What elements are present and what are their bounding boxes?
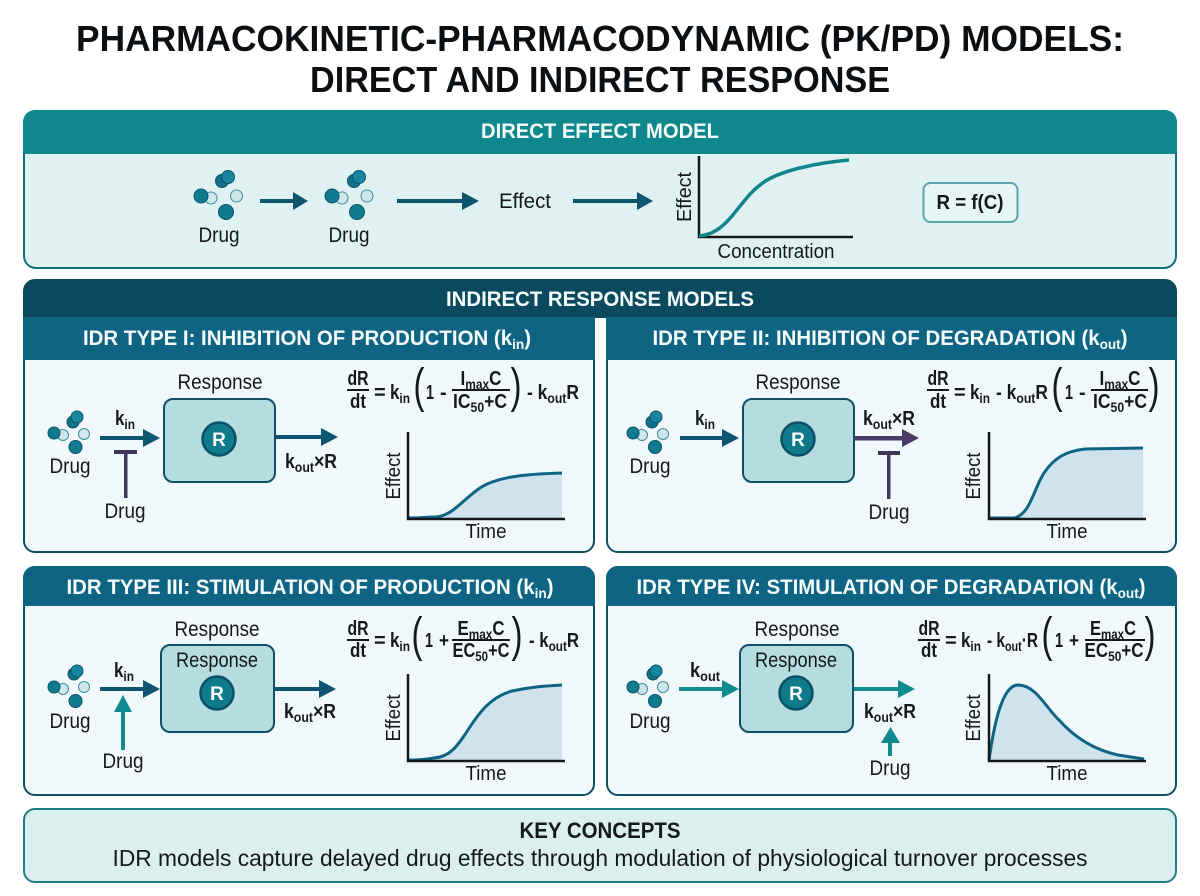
chart: effect vs time xyxy=(963,432,1146,543)
icon: drug molecules xyxy=(48,411,90,454)
equation: max xyxy=(465,376,489,392)
equation: C xyxy=(1128,368,1140,390)
chart: effect vs time: Effect xyxy=(383,694,405,742)
arrow: drug to effect xyxy=(397,192,479,210)
label: response: Response xyxy=(174,618,260,641)
equation: ·R xyxy=(1022,630,1038,652)
chart: effect vs time: Effect xyxy=(383,452,405,500)
chart: effect vs time: Time xyxy=(466,763,506,785)
arrow: effect to chart xyxy=(573,192,653,210)
response compartment: R xyxy=(791,430,805,451)
arrow: stimulation xyxy=(114,695,132,750)
label: kout x R: k xyxy=(284,701,295,723)
response compartment xyxy=(740,645,853,732)
label: kout x R: ×R xyxy=(893,701,916,723)
label: kout x R: out xyxy=(873,416,892,432)
equation: R xyxy=(1035,382,1048,404)
equation box xyxy=(924,183,1018,222)
label: kout x R: ×R xyxy=(892,408,915,430)
equation: C xyxy=(1124,618,1136,640)
equation: EC xyxy=(452,640,480,662)
equation: 1 xyxy=(426,382,434,404)
label: kout x R: k xyxy=(863,408,874,430)
equation: 50 xyxy=(1111,399,1124,415)
label: kin: k xyxy=(115,408,126,430)
equation: - k xyxy=(987,630,1010,652)
equation: 50 xyxy=(471,399,484,415)
equation: dR xyxy=(918,618,940,640)
equation: E xyxy=(1090,618,1103,640)
equation: out xyxy=(1016,390,1036,406)
label: drug: Drug xyxy=(50,455,90,478)
type II header xyxy=(606,317,1177,360)
equation: in xyxy=(399,390,410,406)
arrow: kout in xyxy=(679,680,739,698)
equation: ( xyxy=(412,609,423,662)
response compartment: R xyxy=(210,684,224,705)
equation: in xyxy=(979,390,990,406)
direct effect header: DIRECT EFFECT MODEL xyxy=(481,120,719,143)
equation: ) xyxy=(1148,360,1160,413)
label: drug stimulator: Drug xyxy=(870,757,910,780)
equation: E xyxy=(458,618,471,640)
equation: dR xyxy=(348,618,369,640)
equation: - k xyxy=(527,382,550,404)
response compartment xyxy=(161,645,274,732)
type III header: IDR TYPE III: STIMULATION OF PRODUCTION (k xyxy=(66,576,548,599)
equation: ( xyxy=(414,360,425,413)
response compartment xyxy=(164,399,275,482)
equation: R xyxy=(567,630,579,652)
equation: I xyxy=(1100,368,1105,390)
chart: effect vs time xyxy=(963,674,1146,785)
arrow: drug to drug xyxy=(260,192,308,210)
arrow: inhibited kout xyxy=(855,429,919,447)
equation: max xyxy=(469,626,493,642)
type II header: out xyxy=(1100,336,1121,352)
equation: ( xyxy=(1042,609,1053,662)
equation: in xyxy=(399,638,410,654)
chart: effect vs concentration: Concentration xyxy=(718,241,834,263)
arrow: kout xyxy=(275,680,336,698)
key concepts heading: KEY CONCEPTS xyxy=(520,818,680,843)
arrow: stimulated kout xyxy=(854,680,915,698)
equation: IC xyxy=(453,391,473,413)
equation: 50 xyxy=(1108,648,1121,664)
icon: drug molecules xyxy=(48,665,90,708)
equation: = xyxy=(374,630,386,652)
equation xyxy=(918,609,1156,664)
equation: max xyxy=(1101,626,1124,642)
label: kout x R: k xyxy=(864,701,875,723)
icon: drug molecules 2 xyxy=(325,170,373,220)
icon: drug molecules 1 xyxy=(194,170,242,220)
arrow: kin xyxy=(680,429,739,447)
equation: EC xyxy=(1084,640,1112,662)
panel: key concepts xyxy=(24,809,1176,882)
icon: drug molecules xyxy=(627,665,668,708)
label: drug: Drug xyxy=(630,710,670,733)
equation: ( xyxy=(1052,360,1063,413)
equation: dR xyxy=(348,368,369,390)
arrow: kin xyxy=(100,680,160,698)
inhibition bar xyxy=(114,450,137,498)
label: drug: Drug xyxy=(50,710,90,733)
label: response: Response xyxy=(178,371,262,394)
equation: +C xyxy=(1121,640,1144,662)
arrow: kin xyxy=(100,429,160,447)
equation: out xyxy=(549,638,567,654)
chart: effect vs concentration xyxy=(674,156,853,263)
chart: effect vs time: Time xyxy=(466,521,506,543)
label: effect: Effect xyxy=(499,190,551,213)
type IV header: IDR TYPE IV: STIMULATION OF DEGRADATION (k xyxy=(636,576,1133,599)
label: drug 2: Drug xyxy=(328,224,370,247)
equation: +C xyxy=(488,640,510,662)
label: kout x R: ×R xyxy=(314,451,337,473)
label: response: Response xyxy=(756,371,840,394)
direct effect header xyxy=(23,110,1177,154)
type III header xyxy=(23,566,595,606)
equation: 1 xyxy=(425,630,433,652)
equation: max xyxy=(1104,376,1128,392)
equation: dt xyxy=(930,391,946,413)
type IV header: ) xyxy=(1139,576,1146,599)
inhibition bar xyxy=(878,451,900,499)
equation: 1 xyxy=(1055,630,1063,652)
equation: in xyxy=(970,638,981,654)
arrow: stimulation xyxy=(881,727,900,756)
label: response: Response xyxy=(754,618,840,641)
equation xyxy=(347,609,579,664)
title: DIRECT AND INDIRECT RESPONSE xyxy=(310,59,890,100)
response compartment: R xyxy=(789,684,803,705)
equation: dt xyxy=(350,640,366,662)
key concepts text: IDR models capture delayed drug effects through modulation of physiological turnover processes xyxy=(112,845,1088,871)
response compartment xyxy=(743,399,854,482)
equation: out xyxy=(547,390,567,406)
equation: k xyxy=(970,382,981,404)
label: drug stimulator: Drug xyxy=(102,750,144,773)
panel: IDR type II xyxy=(606,317,1177,552)
type IV header xyxy=(606,566,1177,606)
equation: 1 xyxy=(1065,382,1073,404)
equation: dt xyxy=(350,391,366,413)
chart: effect vs concentration: Effect xyxy=(674,172,696,222)
title: PHARMACOKINETIC-PHARMACODYNAMIC (PK/PD) MODELS: xyxy=(76,18,1124,59)
label: kout x R: out xyxy=(294,709,313,725)
chart: effect vs time: Effect xyxy=(963,452,985,500)
type I header: in xyxy=(512,336,524,352)
chart: effect vs time: Effect xyxy=(963,694,985,742)
equation: I xyxy=(460,368,466,390)
type III header: in xyxy=(535,585,547,601)
type I header: IDR TYPE I: INHIBITION OF PRODUCTION (k xyxy=(83,327,524,350)
response compartment: R xyxy=(212,430,226,451)
equation: C xyxy=(492,618,504,640)
label: drug 1: Drug xyxy=(198,224,240,247)
panel: IDR type I xyxy=(23,317,595,552)
equation: dt xyxy=(921,640,937,662)
label: drug: Drug xyxy=(630,455,670,478)
type II header: ) xyxy=(1121,327,1128,350)
type III header: ) xyxy=(547,576,554,599)
label: kin: in xyxy=(124,416,135,432)
type I header xyxy=(23,317,595,360)
type I header: ) xyxy=(524,327,531,350)
equation: IC xyxy=(1093,391,1113,413)
equation: = xyxy=(945,630,957,652)
response compartment: Response xyxy=(176,649,258,672)
equation: ) xyxy=(510,360,522,413)
arrow: kout xyxy=(276,428,338,446)
equation: - xyxy=(1079,382,1086,404)
label: kout x R: out xyxy=(874,709,893,725)
panel: indirect response models header xyxy=(23,279,1177,318)
title xyxy=(76,18,1124,100)
label: kin: in xyxy=(704,416,715,432)
label: kin: in xyxy=(123,668,134,684)
label: kout: out xyxy=(700,668,720,684)
equation: R xyxy=(566,382,579,404)
response compartment: Response xyxy=(755,649,837,672)
chart: effect vs time: Time xyxy=(1046,763,1088,785)
equation: dR xyxy=(928,368,949,390)
equation: +C xyxy=(484,391,507,413)
equation xyxy=(347,360,579,415)
chart: effect vs time xyxy=(383,432,565,543)
equation: + xyxy=(439,630,449,652)
label: drug inhibitor: Drug xyxy=(104,500,146,523)
equation: ) xyxy=(512,609,522,662)
equation: k xyxy=(961,630,972,652)
label: kout x R: k xyxy=(285,451,296,473)
equation: k xyxy=(390,630,401,652)
panel: direct effect model xyxy=(23,110,1177,268)
equation: C xyxy=(489,368,502,390)
label: kin: k xyxy=(114,660,125,682)
type IV header: out xyxy=(1118,585,1139,601)
chart: effect vs time: Time xyxy=(1046,521,1088,543)
label: kout x R: ×R xyxy=(313,701,336,723)
equation: + xyxy=(1069,630,1079,652)
equation: +C xyxy=(1124,391,1147,413)
label: kout x R: out xyxy=(295,459,314,475)
equation: = xyxy=(374,382,386,404)
type II header: IDR TYPE II: INHIBITION OF DEGRADATION (k xyxy=(652,327,1113,350)
equation: k xyxy=(390,382,401,404)
equation xyxy=(927,360,1160,415)
panel: indirect response models header: INDIRECT RESPONSE MODELS xyxy=(446,288,754,311)
label: kout: k xyxy=(690,660,701,682)
equation box: R = f(C) xyxy=(936,192,1004,214)
equation: - k xyxy=(996,382,1019,404)
equation: - k xyxy=(529,630,552,652)
panel: IDR type III xyxy=(23,566,595,795)
equation: ) xyxy=(1144,609,1156,662)
chart: effect vs time xyxy=(383,674,565,785)
label: kin: k xyxy=(695,408,706,430)
equation: = xyxy=(954,382,966,404)
equation: out xyxy=(1005,638,1022,654)
label: drug inhibitor: Drug xyxy=(868,501,910,524)
panel: IDR type IV xyxy=(606,566,1177,795)
icon: drug molecules xyxy=(627,411,668,454)
equation: 50 xyxy=(475,648,488,664)
equation: - xyxy=(440,382,447,404)
